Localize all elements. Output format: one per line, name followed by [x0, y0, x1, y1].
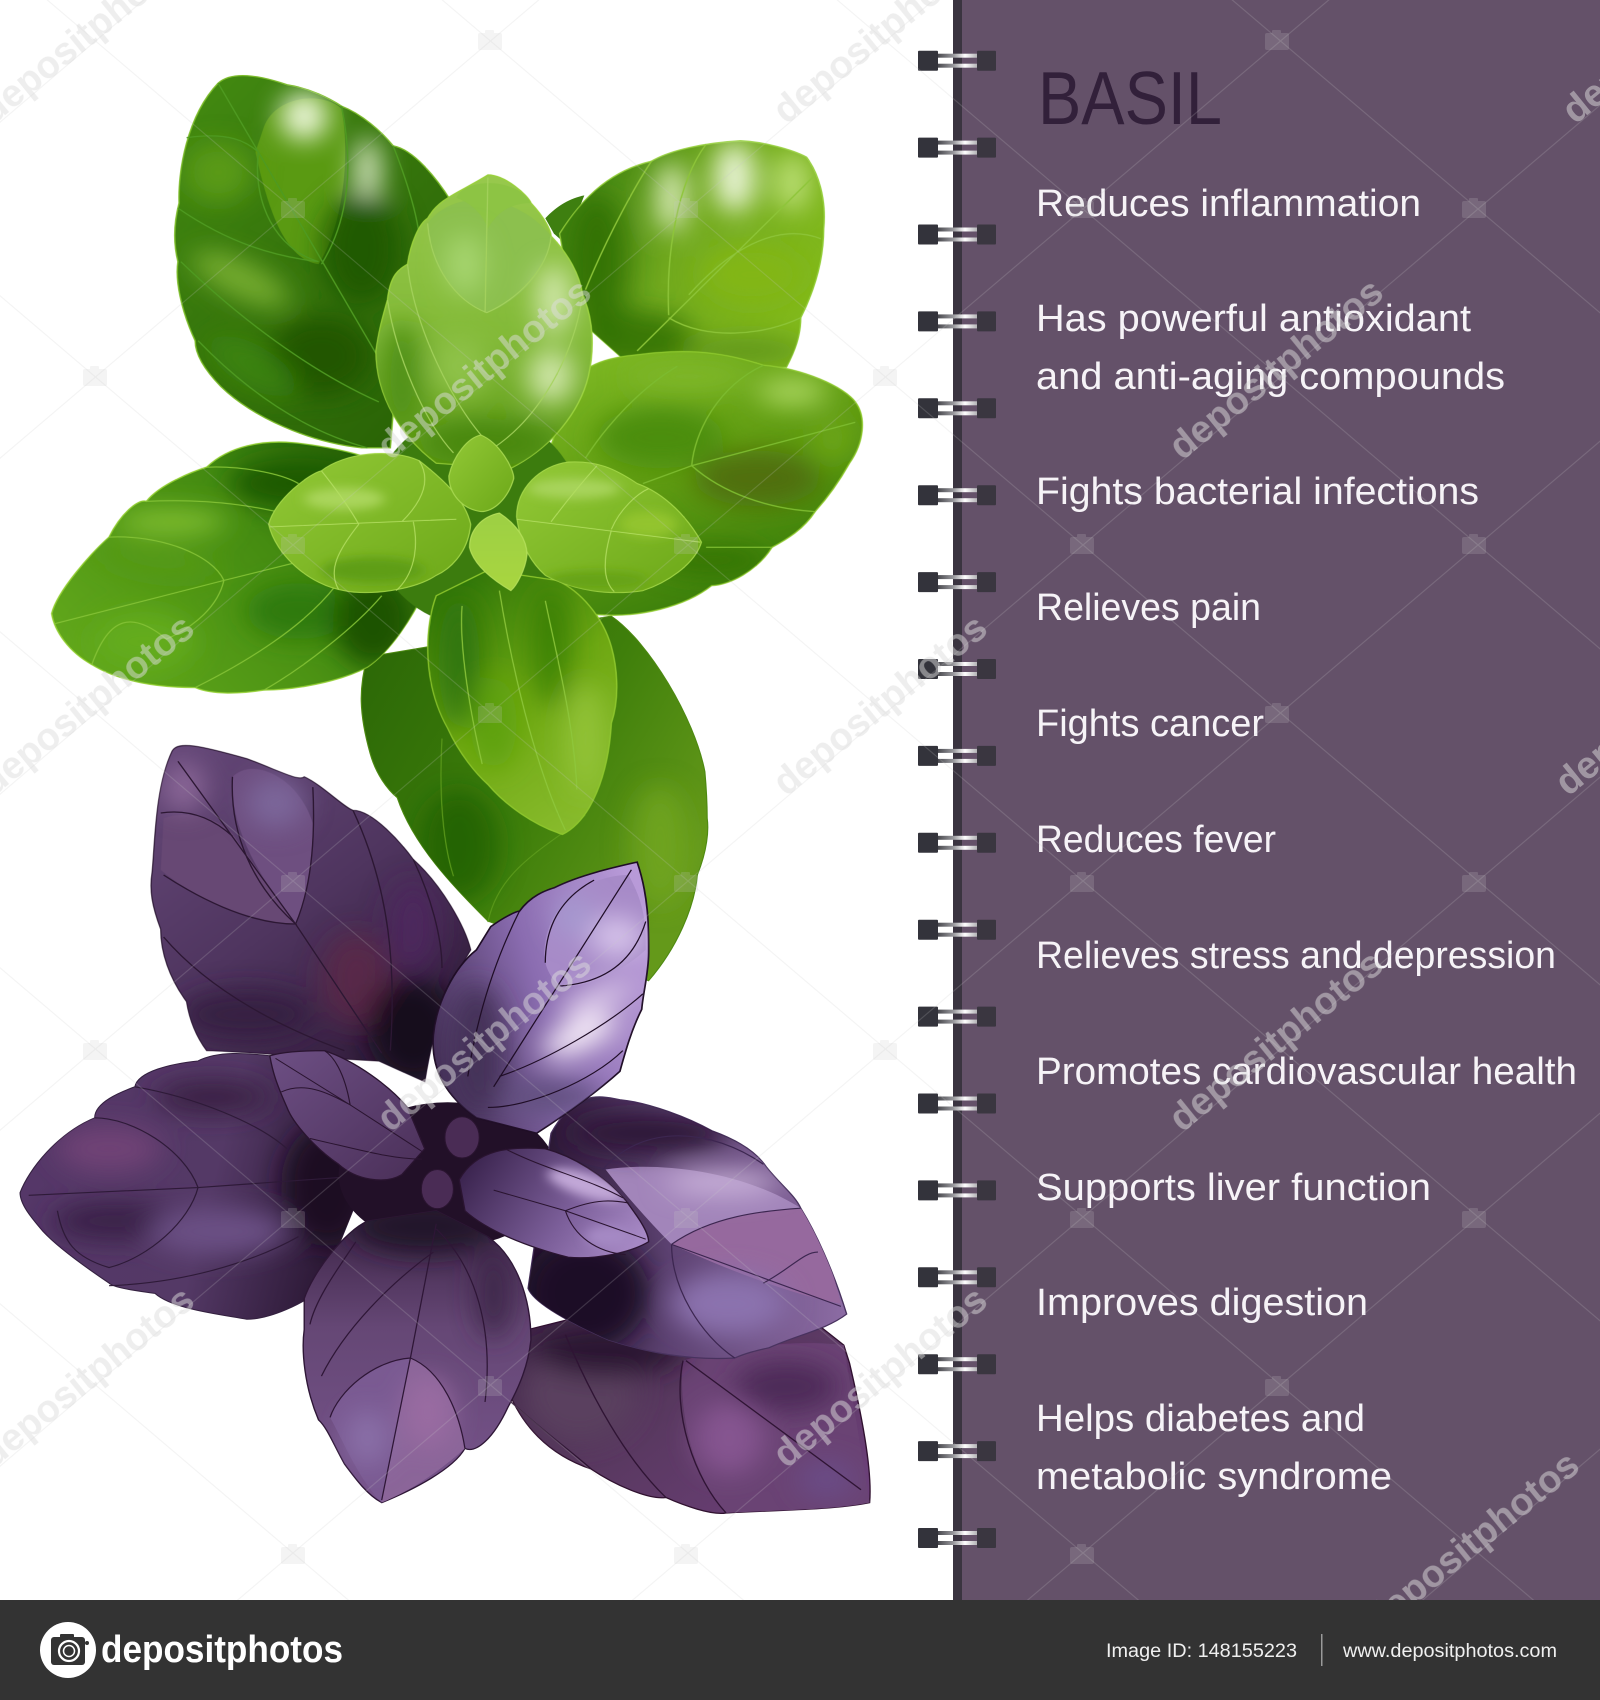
benefits list: Relieves stress and depression	[1036, 935, 1556, 977]
benefits list	[1036, 183, 1577, 1498]
benefits list: Helps diabetes and	[1036, 1398, 1365, 1440]
leaf: centre tall	[376, 175, 592, 468]
watermark overlay: depositphotos	[765, 606, 995, 804]
benefits list: Fights cancer	[1036, 703, 1264, 745]
watermark overlay: depositphotos	[1357, 1443, 1587, 1641]
website: www.depositphotos.com	[1342, 1641, 1557, 1662]
benefits list: Supports liver function	[1036, 1167, 1431, 1209]
leaf: bottom right back	[505, 1304, 870, 1513]
leaf: small right purple	[459, 1148, 649, 1258]
leaf: small back leaf	[545, 195, 584, 244]
leaf: small centre right	[517, 462, 701, 593]
image id: Image ID: 148155223	[1106, 1641, 1297, 1662]
watermark overlay: depositphotos	[765, 1278, 995, 1476]
leaf: left large purple	[20, 1053, 373, 1319]
leaf: lower back	[361, 616, 708, 981]
leaf: bottom centre purple	[303, 1198, 531, 1503]
leaf: upper right	[560, 141, 824, 371]
panel: notebook page	[953, 0, 1600, 1600]
benefits list: and anti-aging compounds	[1036, 356, 1505, 398]
benefits list: Relieves pain	[1036, 587, 1261, 629]
leaf: top large purple	[151, 745, 471, 1082]
spiral binding rings	[918, 51, 996, 1548]
benefits list: Promotes cardiovascular health	[1036, 1051, 1577, 1093]
benefits list: Fights bacterial infections	[1036, 471, 1479, 513]
watermark overlay: depositphotos	[1161, 270, 1391, 468]
title: BASIL	[1038, 56, 1222, 140]
watermark overlay: depositphotos	[369, 942, 599, 1140]
footer bar	[0, 1600, 1600, 1700]
logo wordmark: depositphotos	[101, 1629, 343, 1671]
leaf: small left purple	[270, 1051, 425, 1180]
leaf: right	[505, 352, 862, 615]
illustration: purple basil sprig	[20, 745, 870, 1513]
leaf: dark centre backing	[370, 412, 583, 626]
benefits list: Reduces inflammation	[1036, 183, 1421, 225]
leaf: small centre left	[269, 453, 471, 593]
footer divider	[1321, 1634, 1322, 1666]
leaf: tiny buds	[421, 1117, 479, 1209]
benefits list: Reduces fever	[1036, 819, 1276, 861]
benefits list: Has powerful antioxidant	[1036, 298, 1471, 340]
benefits list: metabolic syndrome	[1036, 1456, 1392, 1498]
leaf: upper right light bud	[433, 862, 649, 1133]
leaf: tiny bud bottom	[470, 513, 527, 591]
leaf: tiny bud top	[449, 435, 514, 512]
leaf: right large purple	[522, 1097, 847, 1358]
illustration: green basil sprig	[52, 76, 862, 981]
leaf: left	[52, 442, 425, 693]
watermark overlay: depositphotos	[369, 270, 599, 468]
benefits list: Improves digestion	[1036, 1282, 1368, 1324]
watermark overlay: depositphotos	[1161, 942, 1391, 1140]
leaf: upper left large	[175, 76, 451, 448]
leaf: dark centre	[339, 1102, 557, 1247]
icon: camera logo	[40, 1622, 96, 1678]
leaf: lower front	[428, 570, 617, 834]
